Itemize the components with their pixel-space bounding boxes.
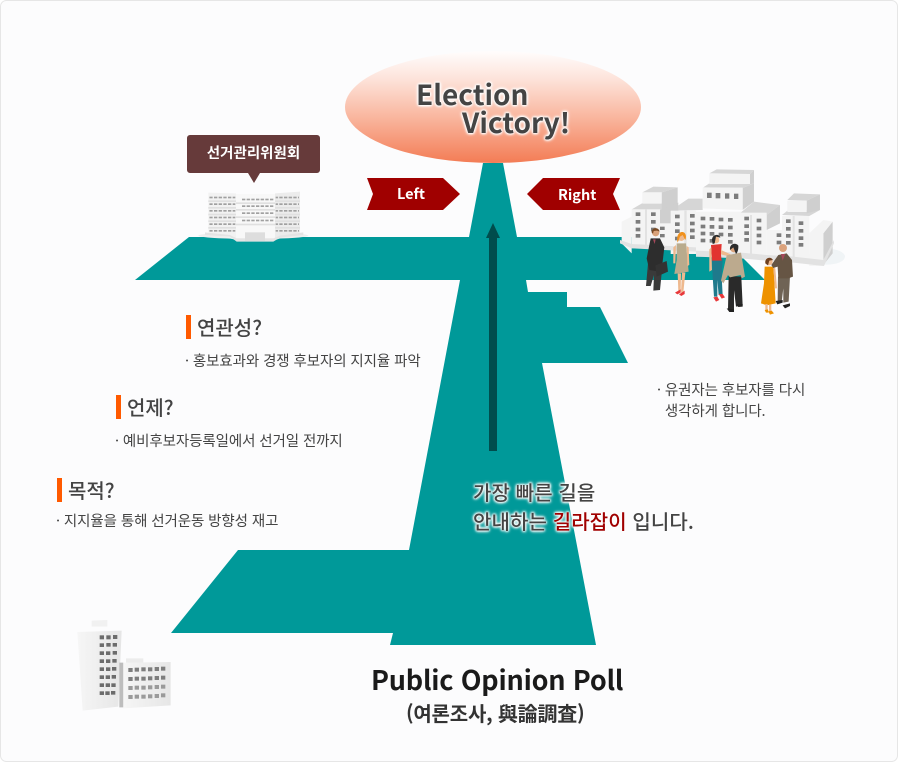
title: Victory!: Victory! bbox=[462, 102, 570, 142]
block: relevance bbox=[185, 312, 421, 371]
man in beige sweater bbox=[721, 244, 745, 312]
label: Left: Left bbox=[397, 183, 425, 204]
left pennant bbox=[367, 178, 460, 210]
block: purpose bbox=[56, 475, 278, 531]
woman in orange dress bbox=[761, 258, 777, 315]
accent bar bbox=[186, 315, 191, 339]
icon: office buildings bbox=[77, 620, 171, 711]
title: Public Opinion Poll: Public Opinion Poll bbox=[371, 659, 623, 698]
note: voters reconsider: 생각하게 합니다. bbox=[665, 400, 766, 421]
label: Right: Right bbox=[558, 184, 596, 205]
right pennant bbox=[527, 178, 620, 210]
heading: relevance: 연관성? bbox=[197, 312, 262, 341]
ellipse: election victory bbox=[345, 51, 641, 163]
note: voters reconsider: · 유권자는 후보자를 다시 bbox=[657, 379, 805, 400]
accent bar bbox=[57, 478, 62, 502]
text: purpose detail: · 지지율을 통해 선거운동 방향성 재고 bbox=[56, 510, 278, 531]
speech bubble: election commission bbox=[187, 135, 320, 183]
woman in red top bbox=[709, 235, 731, 302]
teal road map bbox=[135, 163, 765, 645]
block: when bbox=[115, 392, 343, 451]
upward arrow bbox=[486, 223, 500, 451]
accent bar bbox=[116, 395, 121, 419]
man with briefcase bbox=[646, 228, 668, 291]
icon: group of people bbox=[646, 228, 793, 315]
icon: city buildings bbox=[620, 169, 845, 266]
text: relevance detail: · 홍보효과와 경쟁 후보자의 지지율 파악 bbox=[185, 350, 421, 371]
heading: purpose: 목적? bbox=[68, 475, 115, 504]
heading: when: 언제? bbox=[127, 392, 174, 421]
text: when detail: · 예비후보자등록일에서 선거일 전까지 bbox=[115, 430, 343, 451]
label: election commission: 선거관리위원회 bbox=[207, 142, 300, 163]
woman in beige dress bbox=[673, 232, 689, 296]
man in brown suit bbox=[771, 244, 793, 308]
callout: fastest route guide: 안내하는 길라잡이 입니다. bbox=[473, 506, 694, 535]
roofs and side walls bbox=[632, 169, 820, 216]
subtitle: Korean and hanja: (여론조사, 與論調査) bbox=[406, 698, 584, 727]
title: Election: Election bbox=[416, 74, 529, 114]
callout: fastest route guide bbox=[470, 477, 694, 535]
icon: election commission building bbox=[198, 192, 308, 242]
note: voters reconsider bbox=[657, 379, 805, 421]
callout: fastest route guide: 가장 빠른 길을 bbox=[473, 477, 595, 506]
